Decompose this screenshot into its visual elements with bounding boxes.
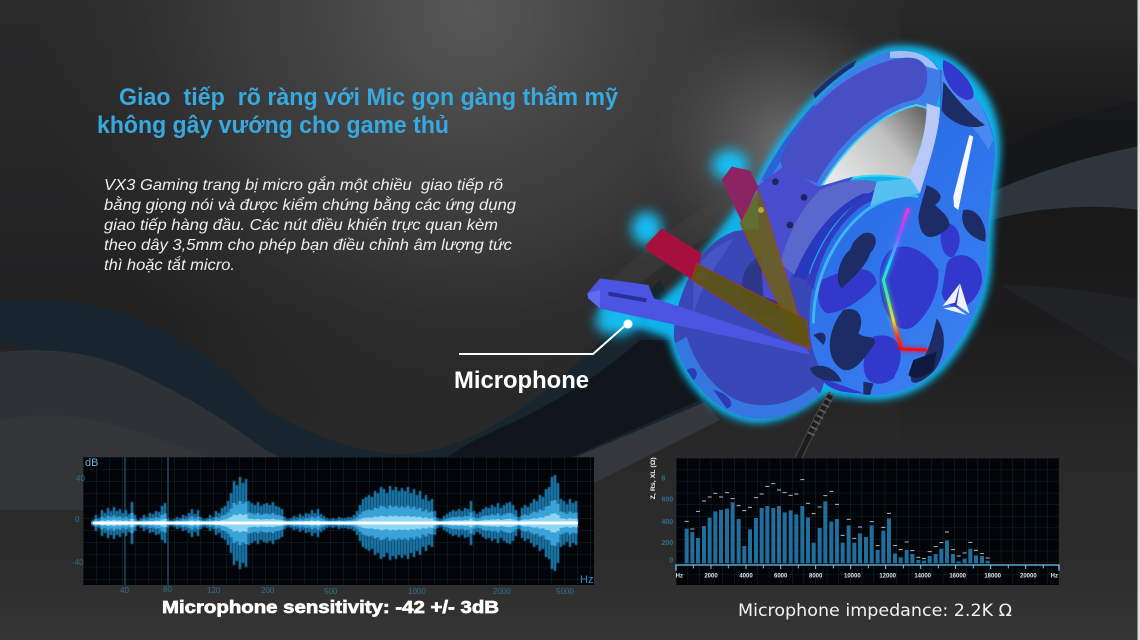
axis labels: 120 xyxy=(207,586,221,595)
y axis labels: 8 xyxy=(661,475,665,482)
axis labels: Hz xyxy=(676,573,683,579)
icon: white stripe xyxy=(953,135,973,210)
horizontal axis xyxy=(676,565,1059,571)
y axis labels xyxy=(661,475,673,565)
caption: microphone impedance: Microphone impedance: 2.2K Ω xyxy=(738,601,1012,621)
microphone raised middle xyxy=(646,228,810,348)
axis labels: 200 xyxy=(261,586,275,595)
light strap xyxy=(907,103,942,195)
description text: giao tiếp hàng đầu. Các nút điều khiển trực quan kèm xyxy=(104,216,498,234)
icon: brand logo xyxy=(943,283,969,315)
axis labels: 14000 xyxy=(914,573,932,579)
title xyxy=(97,84,619,139)
camouflage dark xyxy=(810,82,986,395)
axis labels: dB xyxy=(85,457,98,469)
axis labels: 6000 xyxy=(774,573,788,579)
axis labels xyxy=(676,573,1058,579)
axis labels: Hz xyxy=(580,574,593,586)
axis labels: 2000 xyxy=(704,573,718,579)
waveform xyxy=(93,475,578,571)
axis labels: 1000 xyxy=(408,587,426,596)
caption: microphone sensitivity: Microphone sensitivity: -42 +/- 3dB xyxy=(162,597,499,617)
y axis labels: 0 xyxy=(669,558,673,565)
camouflage indigo xyxy=(818,60,982,393)
y axis labels: 200 xyxy=(662,540,673,547)
chart: microphone sensitivity waveform xyxy=(72,457,594,596)
cup rim xyxy=(813,195,918,323)
title: Giao tiếp rõ ràng với Mic gọn gàng thẩm mỹ xyxy=(119,84,619,111)
axis labels: 40 xyxy=(120,586,129,595)
axis labels xyxy=(72,457,593,596)
chart: microphone impedance bars: Z, Rs, XL (Ω) xyxy=(651,457,657,499)
cable xyxy=(798,393,832,458)
description text: theo dây 3,5mm cho phép bạn điều chỉnh âm lượng tức xyxy=(104,237,512,254)
bar peak caps xyxy=(685,480,990,559)
headband opening xyxy=(818,105,928,192)
headband pad xyxy=(780,58,927,183)
axis labels: 12000 xyxy=(879,573,897,579)
microphone boom xyxy=(587,278,810,355)
axis labels: 20000 xyxy=(1020,573,1037,579)
axis labels: 40 xyxy=(76,474,85,483)
RGB light strip xyxy=(883,208,927,350)
bars xyxy=(687,501,988,563)
axis labels: 10000 xyxy=(844,573,861,579)
left ear pad xyxy=(674,229,826,419)
axis labels: 4000 xyxy=(739,573,753,579)
microphone raised upper xyxy=(722,167,810,350)
description text xyxy=(104,175,516,274)
axis labels: 80 xyxy=(163,585,172,594)
axis labels: 8000 xyxy=(809,573,823,579)
icon: mic glow spots xyxy=(595,150,748,335)
microphone callout xyxy=(454,320,632,394)
description text: VX3 Gaming trang bị micro gắn một chiều giao tiếp rõ xyxy=(104,175,503,194)
axis labels: 18000 xyxy=(984,573,1002,579)
axis labels: 2000 xyxy=(493,587,511,596)
headband outer xyxy=(757,50,943,190)
axis labels: 16000 xyxy=(949,573,967,579)
y axis labels: 600 xyxy=(662,496,673,503)
title: không gây vướng cho game thủ xyxy=(97,112,449,139)
ear cup xyxy=(807,60,995,395)
description text: thì hoặc tắt micro. xyxy=(104,255,235,274)
inner strap with dots xyxy=(757,167,880,303)
y axis labels: 400 xyxy=(662,519,673,526)
axis labels: 0 xyxy=(75,515,80,524)
headset illustration xyxy=(587,50,996,458)
axis labels: Hz xyxy=(1051,573,1058,579)
description text: bằng giọng nói và được kiểm chứng bằng các ứng dụng xyxy=(104,195,516,214)
icon: cyan glow xyxy=(600,50,996,418)
axis labels: -40 xyxy=(72,558,84,567)
axis labels: 500 xyxy=(324,587,338,596)
microphone callout: Microphone xyxy=(454,367,589,394)
chart: microphone impedance bars xyxy=(651,457,1059,585)
axis labels: 5000 xyxy=(556,587,574,596)
